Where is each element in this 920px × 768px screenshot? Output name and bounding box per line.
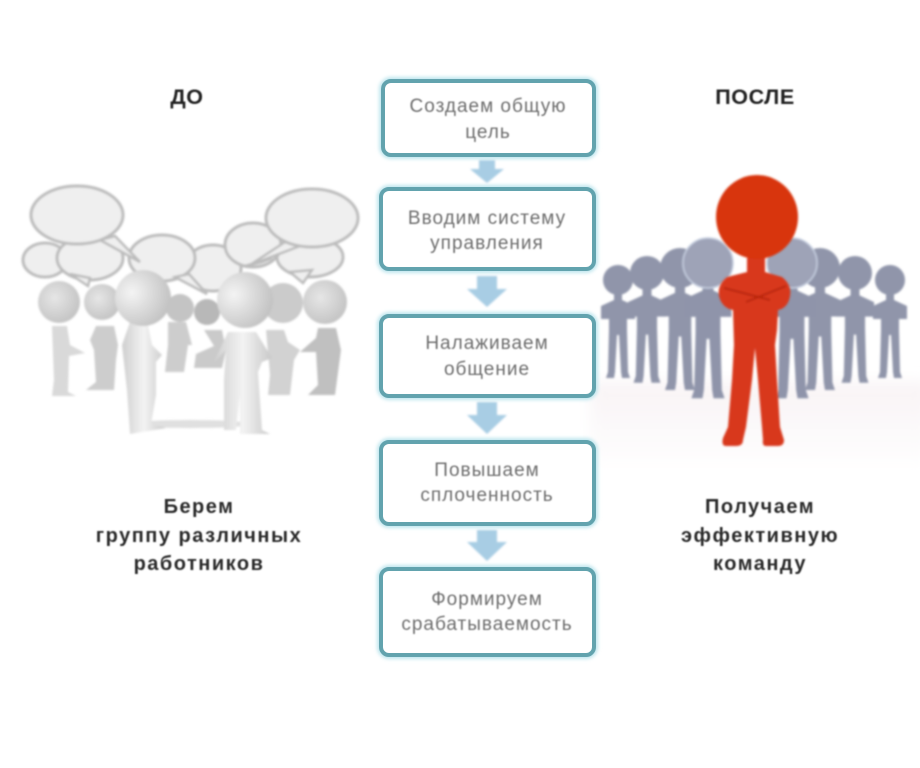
figure: bending man	[115, 270, 250, 434]
arrow 2	[467, 276, 507, 307]
illustration: team with red leader	[590, 175, 920, 472]
heading: after: ПОСЛЕ	[715, 85, 795, 109]
step 3: Налаживаем	[425, 333, 549, 354]
flow: steps from group to team	[381, 81, 594, 655]
step 1	[383, 81, 594, 155]
step 4: Повышаем	[434, 460, 540, 481]
caption: after: Получаем	[705, 496, 815, 518]
caption: after: команду	[713, 553, 807, 575]
caption: before: Берем	[164, 496, 234, 518]
red leader figure	[716, 175, 798, 446]
heading: before: ДО	[170, 85, 204, 109]
step 2: управления	[430, 233, 544, 254]
step 3: общение	[444, 359, 530, 380]
figures in the background	[38, 280, 347, 396]
speech bubbles	[23, 186, 358, 294]
step 1: Создаем общую	[410, 96, 566, 117]
step 5: Формируем	[431, 589, 543, 610]
floor	[590, 382, 920, 472]
step 2: Вводим систему	[408, 208, 566, 229]
caption: after: эффективную	[681, 525, 839, 547]
team of grey figures	[601, 238, 907, 398]
step 5: срабатываемость	[401, 614, 573, 635]
arrow 1	[470, 160, 504, 183]
step 3	[381, 316, 594, 396]
arrow 3	[467, 402, 507, 434]
caption: before: работников	[134, 553, 264, 575]
caption: after	[681, 496, 839, 575]
figure: man in front	[214, 272, 273, 434]
step 4: сплоченность	[420, 485, 554, 506]
arrow 4	[467, 530, 507, 561]
caption: before: группу различных	[96, 525, 302, 547]
caption: before	[96, 496, 302, 575]
step 1: цель	[465, 122, 511, 143]
step 2	[381, 189, 594, 269]
step 5	[381, 569, 594, 655]
step 4	[381, 442, 594, 524]
illustration: group of different workers with speech bubbles	[23, 186, 358, 434]
